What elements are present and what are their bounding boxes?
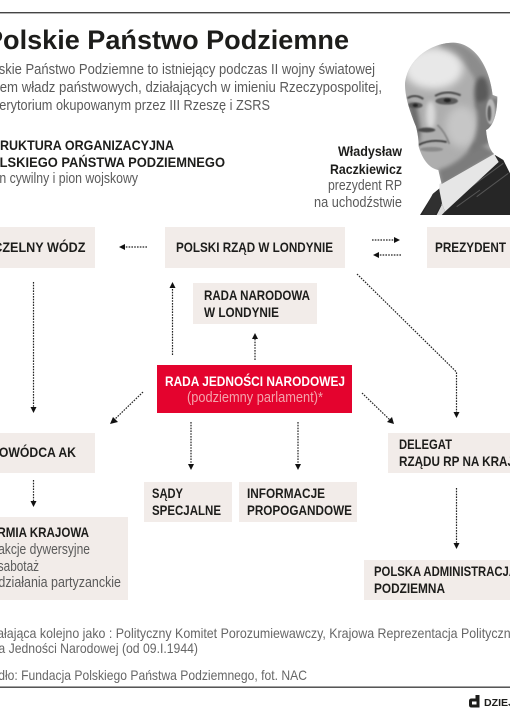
arrow: rada jedności to rada narodowa <box>252 333 258 360</box>
box: Armia Krajowa <box>0 517 128 600</box>
box: Rada Narodowa w Londynie: RADA NARODOWA <box>204 287 310 303</box>
box: Dowódca AK <box>0 433 95 473</box>
person caption: Raczkiewicz <box>330 161 402 177</box>
box: Polski Rząd w Londynie <box>165 227 345 268</box>
section heading <box>0 137 225 187</box>
arrow: rada jedności to dowódca AK <box>110 392 143 424</box>
arrow: rząd to prezydent <box>372 237 400 243</box>
person caption: Władysław <box>338 143 402 159</box>
arrow: rada jedności to rząd <box>170 282 176 355</box>
box: Delegat Rządu RP na Kraj: DELEGAT <box>399 436 452 452</box>
arrow: naczelny wódz to dowódca AK <box>30 282 36 413</box>
box: Rada Jedności Narodowej: RADA JEDNOŚCI NARODOWEJ <box>165 372 345 389</box>
arrow: delegat to administracja <box>454 488 460 549</box>
arrow: rada jedności to delegat <box>362 393 394 424</box>
intro text <box>0 62 382 114</box>
arrow: prezydent to rząd <box>373 252 401 258</box>
footnote <box>0 625 510 656</box>
box: Prezydent <box>427 227 510 268</box>
box: Polski Rząd w Londynie: POLSKI RZĄD W LONDYNIE <box>176 239 333 255</box>
box: Delegat Rządu RP na Kraj <box>388 433 510 473</box>
logo <box>469 695 510 709</box>
arrow: dowódca AK to armia krajowa <box>30 480 36 507</box>
box: Sądy specjalne <box>144 482 232 522</box>
box: Informacje propogandowe: INFORMACJE <box>247 485 325 501</box>
box: Rada Narodowa w Londynie: W LONDYNIE <box>204 304 279 320</box>
person caption <box>314 143 402 211</box>
box: Rada Jedności Narodowej <box>157 365 352 413</box>
arrow: rada jedności to sądy <box>188 422 194 470</box>
person caption: na uchodźstwie <box>314 195 402 211</box>
box: Informacje propogandowe: PROPOGANDOWE <box>247 502 352 518</box>
arrow: rząd to delegat <box>357 274 460 418</box>
box: Naczelny Wódz <box>0 227 95 268</box>
box: Rada Narodowa w Londynie <box>193 283 317 324</box>
box: Sądy specjalne: SPECJALNE <box>152 502 221 518</box>
portrait photo <box>404 40 510 215</box>
box: Polska Administracja Podziemna <box>364 560 510 600</box>
box: Informacje propogandowe <box>239 482 357 522</box>
arrow: rada jedności to informacje <box>295 422 301 470</box>
box: Rada Jedności Narodowej: (podziemny parlament)* <box>187 390 323 406</box>
arrow: rząd to naczelny wódz <box>119 244 147 250</box>
person caption: prezydent RP <box>328 178 402 194</box>
box: Polska Administracja Podziemna: PODZIEMNA <box>374 580 445 596</box>
box: Sądy specjalne: SĄDY <box>152 485 184 501</box>
